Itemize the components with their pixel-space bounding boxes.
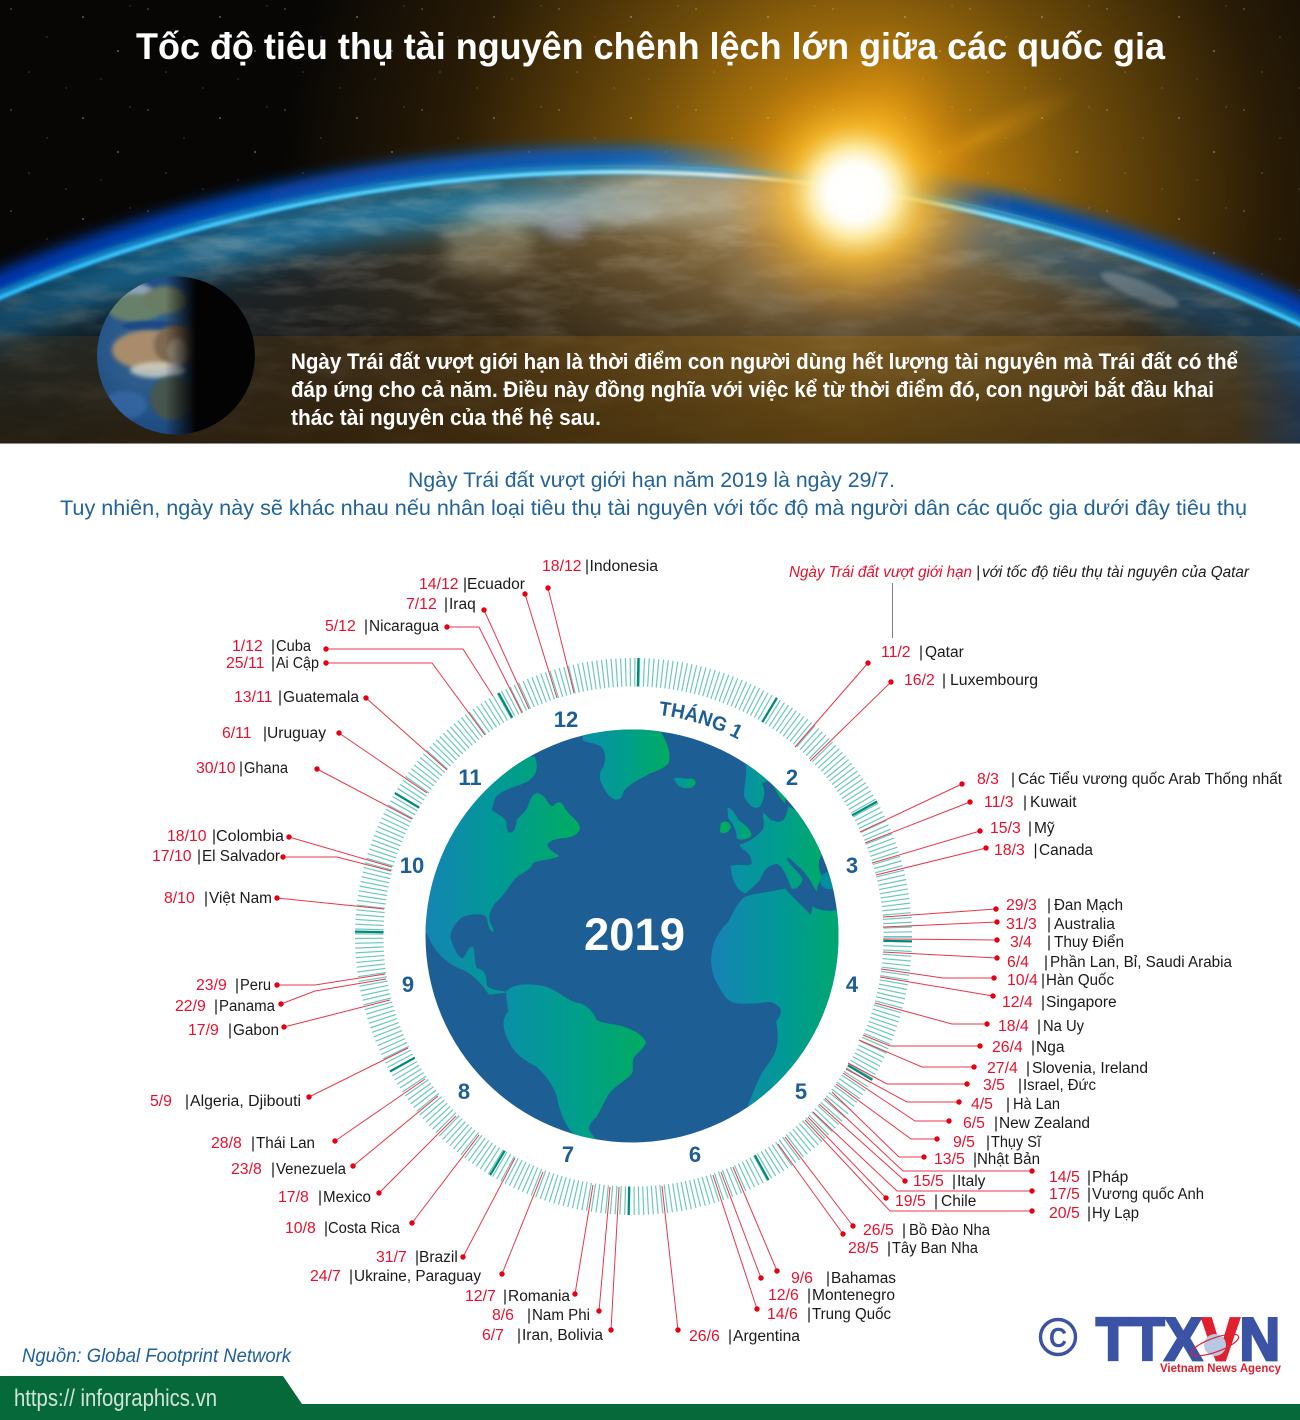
label: Colombia <box>167 828 392 867</box>
text block: definition: Ngày Trái đất vượt giới hạn là thời điểm con người dùng hết lượng tài nguyên mà Trái đất có thể <box>291 349 1238 374</box>
label: Canada: 18/3 <box>994 842 1025 859</box>
label: Bahamas: 9/6 <box>791 1270 813 1287</box>
label: Vietnam: | <box>204 890 208 907</box>
label: Montenegro: | <box>807 1287 811 1304</box>
label: China <box>713 1175 891 1323</box>
label: Gabon: | <box>228 1022 232 1039</box>
label: South Korea: 10/4 <box>1007 972 1038 989</box>
label: Uruguay: Uruguay <box>267 725 326 742</box>
label: Peru: | <box>235 977 239 994</box>
label: Greece: | <box>1087 1205 1091 1222</box>
label: South Korea <box>881 969 1114 989</box>
label: Italy <box>819 1104 986 1190</box>
text block: definition: thác tài nguyên của thế hệ sau. <box>291 405 601 430</box>
label: Ecuador: 14/12 <box>419 576 459 593</box>
label: South Africa: Nam Phi <box>532 1307 590 1324</box>
label: Romania: Romania <box>508 1288 570 1305</box>
label: Vietnam: Việt Nam <box>209 890 272 907</box>
legend note: how to read labels: | <box>976 564 980 581</box>
label: Iran, Bolivia: 6/7 <box>482 1327 504 1344</box>
label: Israel, Germany: Israel, Đức <box>1023 1077 1096 1094</box>
label: Ecuador: Ecuador <box>467 576 525 593</box>
label: El Salvador: El Salvador <box>202 848 280 865</box>
label: Romania: 12/7 <box>465 1288 496 1305</box>
label: Peru: 23/9 <box>196 977 227 994</box>
label: Romania: | <box>503 1288 507 1305</box>
footer: green URL bar <box>0 1376 1300 1420</box>
label: Thailand: | <box>251 1135 255 1152</box>
label: Luxembourg: Luxembourg <box>950 672 1038 689</box>
label: Ukraine, Paraguay: | <box>349 1268 353 1285</box>
label: Japan <box>832 1092 1040 1168</box>
label: Slovenia, Ireland: | <box>1026 1060 1030 1077</box>
label: Portugal: Bồ Đào Nha <box>909 1222 990 1239</box>
month labels around the globe: 11 <box>458 765 482 790</box>
month labels around the globe: 3 <box>846 853 858 878</box>
year label: 2019 <box>584 909 685 960</box>
label: Greece: Hy Lạp <box>1092 1205 1139 1222</box>
label: Australia: Australia <box>1054 916 1115 933</box>
label: Russia: | <box>1031 1039 1035 1056</box>
label: Costa Rica: | <box>324 1220 328 1237</box>
label: Egypt: Ai Cập <box>276 655 319 672</box>
label: Italy: Italy <box>957 1173 986 1190</box>
label: Algeria, Djibouti: | <box>185 1093 189 1110</box>
label: Gabon <box>188 1000 390 1039</box>
label: Finland, Belgium, Saudi Arabia <box>883 952 1232 971</box>
label: Ghana: Ghana <box>244 760 288 777</box>
label: Australia <box>883 916 1115 933</box>
label: Venezuela: Venezuela <box>276 1161 346 1178</box>
label: Iran, Bolivia: Iran, Bolivia <box>522 1327 603 1344</box>
label: Sweden: 3/4 <box>1010 934 1032 951</box>
label: Ghana: 30/10 <box>196 760 236 777</box>
label: Nicaragua: 5/12 <box>325 618 356 635</box>
label: Algeria, Djibouti: Algeria, Djibouti <box>190 1093 301 1110</box>
label: Bahamas <box>733 1167 896 1287</box>
label: Mexico: Mexico <box>323 1189 371 1206</box>
label: Mexico <box>278 1116 456 1206</box>
illustration: globe with 2019 <box>420 720 860 1142</box>
label: Ukraine, Paraguay <box>310 1172 543 1285</box>
label: France: | <box>1087 1169 1091 1186</box>
label: Panama: | <box>214 998 218 1015</box>
label: USA <box>872 820 1055 863</box>
label: Russia: 26/4 <box>992 1039 1023 1056</box>
label: Bahamas: | <box>826 1270 830 1287</box>
label: Qatar: 11/2 <box>881 644 911 661</box>
callouts: country labels clockwise from Qatar <box>150 558 1283 1345</box>
label: Spain: Tây Ban Nha <box>892 1240 978 1257</box>
label: Norway: Na Uy <box>1043 1018 1084 1035</box>
label: UAE: Các Tiểu vương quốc Arab Thống nhất <box>1018 771 1283 788</box>
label: Japan: 13/5 <box>934 1151 965 1168</box>
icon: small Earth half in shadow <box>97 276 255 434</box>
label: Gabon: 17/9 <box>188 1022 219 1039</box>
label: United Kingdom: Vương quốc Anh <box>1092 1186 1204 1203</box>
label: Ecuador <box>419 576 557 698</box>
label: Ghana: | <box>239 760 243 777</box>
label: Nicaragua: | <box>364 618 368 635</box>
label: Uruguay: 6/11 <box>222 725 252 742</box>
label: China: Trung Quốc <box>812 1306 891 1323</box>
label: Luxembourg: 16/2 <box>904 672 935 689</box>
label: Algeria, Djibouti: 5/9 <box>150 1093 172 1110</box>
label: Cuba <box>232 638 493 696</box>
label: Iraq: | <box>444 596 448 613</box>
label: France: 14/5 <box>1049 1169 1080 1186</box>
month labels around the globe: 4 <box>846 972 859 997</box>
legend note: how to read labels: với tốc độ tiêu thụ tài nguyên của Qatar <box>982 564 1250 581</box>
month 1 curved label: THÁNG 1 <box>660 701 742 740</box>
label: Cuba: Cuba <box>276 638 311 655</box>
label: Indonesia <box>542 558 658 693</box>
month labels around the globe: 10 <box>400 853 424 878</box>
label: Panama <box>175 979 386 1015</box>
label: Norway: | <box>1037 1018 1041 1035</box>
label: Colombia: 18/10 <box>167 828 207 845</box>
label: Switzerland <box>836 1084 1042 1151</box>
label: Kuwait: | <box>1023 794 1027 811</box>
continent: Africa <box>711 888 838 1108</box>
label: Israel, Germany: 3/5 <box>983 1077 1005 1094</box>
label: Indonesia: | <box>585 558 589 575</box>
label: Uruguay <box>222 725 427 793</box>
label: Peru: Peru <box>240 977 271 994</box>
label: Luxembourg <box>810 672 1038 761</box>
label: Iraq: Iraq <box>449 596 476 613</box>
label: Singapore: Singapore <box>1046 994 1117 1011</box>
label: Sweden <box>883 934 1124 951</box>
label: Japan: | <box>973 1151 977 1168</box>
label: Thailand: Thái Lan <box>256 1135 315 1152</box>
label: Argentina: Argentina <box>733 1328 800 1345</box>
label: Australia: | <box>1047 916 1051 933</box>
label: Egypt: | <box>271 655 275 672</box>
continent: South America <box>504 984 646 1140</box>
label: New Zealand: New Zealand <box>999 1115 1090 1132</box>
label: Qatar <box>795 644 964 747</box>
label: Finland, Belgium, Saudi Arabia: 6/4 <box>1007 954 1029 971</box>
month labels around the globe: 2 <box>786 765 798 790</box>
label: Finland, Belgium, Saudi Arabia: Phần Lan, Bỉ, Saudi Arabia <box>1050 954 1232 971</box>
label: Slovenia, Ireland: Slovenia, Ireland <box>1032 1060 1148 1077</box>
label: Norway: 18/4 <box>998 1018 1029 1035</box>
label: Qatar: Qatar <box>925 644 964 661</box>
label: Ghana <box>196 760 412 819</box>
legend note: how to read labels: Ngày Trái đất vượt giới hạn <box>789 564 972 581</box>
label: UAE: 8/3 <box>977 771 999 788</box>
continent: Ireland <box>720 822 731 833</box>
continent: Europe <box>730 806 822 894</box>
label: Switzerland: | <box>986 1134 990 1151</box>
label: New Zealand: 6/5 <box>963 1115 985 1132</box>
label: Denmark: Đan Mạch <box>1054 897 1123 914</box>
label: Mexico: 17/8 <box>278 1189 309 1206</box>
label: Spain: | <box>887 1240 891 1257</box>
continent: Scandinavia <box>744 760 787 808</box>
label: Argentina <box>662 1186 800 1345</box>
label: Chile <box>808 1117 976 1210</box>
label: France <box>825 1098 1128 1186</box>
label: Peru <box>196 974 385 994</box>
label: Sweden: Thuy Điển <box>1054 934 1124 951</box>
label: Singapore: | <box>1041 994 1045 1011</box>
label: Israel, Germany <box>848 1063 1096 1094</box>
label: Ukraine, Paraguay: 24/7 <box>310 1268 341 1285</box>
label: Portugal: | <box>902 1222 906 1239</box>
label: Guatemala <box>234 689 447 770</box>
heading: main title: Tốc độ tiêu thụ tài nguyên chênh lệch lớn giữa các quốc gia <box>136 26 1165 67</box>
label: Ukraine, Paraguay: Ukraine, Paraguay <box>354 1268 481 1285</box>
label: Russia: Nga <box>1036 1039 1065 1056</box>
label: Brazil <box>376 1158 515 1266</box>
subheading: intro sentences <box>60 468 1247 520</box>
label: Kuwait <box>865 794 1077 843</box>
month labels around the globe <box>400 701 859 1167</box>
text block: definition: đáp ứng cho cả năm. Điều này đồng nghĩa với việc kể từ thời điểm đó, con người bắt đầu khai <box>291 377 1214 402</box>
label: Iraq: 7/12 <box>406 596 437 613</box>
label: Guatemala: Guatemala <box>283 689 359 706</box>
month labels around the globe: 7 <box>562 1142 574 1167</box>
label: New Zealand <box>843 1073 1090 1132</box>
label: Japan: Nhật Bản <box>977 1151 1040 1168</box>
label: Romania <box>465 1185 593 1305</box>
label: Slovenia, Ireland <box>859 1040 1148 1077</box>
label: Iran, Bolivia <box>482 1187 619 1344</box>
banner: space photo of Earth at sunrise <box>0 0 1300 450</box>
label: Greece <box>805 1120 1139 1222</box>
label: Singapore: 12/4 <box>1002 994 1033 1011</box>
label: Switzerland: 9/5 <box>953 1134 975 1151</box>
label: Venezuela <box>231 1096 438 1178</box>
label: South Africa <box>492 1187 610 1324</box>
label: Argentina: | <box>728 1328 732 1345</box>
legend note: how to read labels <box>789 564 1250 638</box>
label: Australia: 31/3 <box>1006 916 1037 933</box>
label: Switzerland: Thụy Sĩ <box>991 1134 1042 1151</box>
label: Montenegro: 12/6 <box>768 1287 799 1304</box>
label: Kuwait: Kuwait <box>1030 794 1077 811</box>
label: Montenegro: Montenegro <box>812 1287 895 1304</box>
label: Kuwait: 11/3 <box>984 794 1014 811</box>
label: France: Pháp <box>1092 1169 1128 1186</box>
label: Netherlands: 4/5 <box>971 1096 993 1113</box>
month labels around the globe: 12 <box>554 707 578 732</box>
label: China: | <box>807 1306 811 1323</box>
label: El Salvador <box>152 848 391 871</box>
label: Chile: Chile <box>941 1193 976 1210</box>
label: New Zealand: | <box>994 1115 998 1132</box>
label: Algeria, Djibouti <box>150 1048 408 1110</box>
label: Portugal <box>785 1137 990 1239</box>
label: Denmark: | <box>1047 897 1051 914</box>
label: Canada: | <box>1034 842 1038 859</box>
logo: TTXVN Vietnam News Agency: TTXVN <box>1096 1306 1280 1373</box>
label: Gabon: Gabon <box>233 1022 279 1039</box>
label: United Kingdom <box>813 1112 1204 1203</box>
label: South Korea: Hàn Quốc <box>1046 972 1114 989</box>
label: Iraq <box>406 596 529 709</box>
label: Chile: | <box>934 1193 938 1210</box>
label: Vietnam: 8/10 <box>164 890 195 907</box>
label: Spain: 28/5 <box>848 1240 879 1257</box>
label: Brazil: Brazil <box>419 1249 458 1266</box>
label: USA: | <box>1028 820 1032 837</box>
label: Italy: | <box>952 1173 956 1190</box>
label: Argentina: 26/6 <box>689 1328 720 1345</box>
logo: TTXVN Vietnam News Agency: Vietnam News Agency <box>1160 1363 1282 1375</box>
label: Chile: 19/5 <box>895 1193 926 1210</box>
continent: Iceland <box>674 778 696 788</box>
label: Bahamas: Bahamas <box>831 1270 896 1287</box>
label: Mexico: | <box>318 1189 322 1206</box>
footer: green URL bar: https:// infographics.vn <box>14 1385 217 1412</box>
label: Costa Rica: 10/8 <box>285 1220 316 1237</box>
label: Venezuela: | <box>271 1161 275 1178</box>
label: Costa Rica <box>285 1135 479 1237</box>
label: Netherlands: Hà Lan <box>1013 1096 1060 1113</box>
label: Thailand: 28/8 <box>211 1135 242 1152</box>
label: South Africa: 8/6 <box>492 1307 514 1324</box>
label: Russia <box>863 1035 1065 1056</box>
label: Netherlands: | <box>1006 1096 1010 1113</box>
label: Iran, Bolivia: | <box>517 1327 521 1344</box>
continent: Great Britain <box>727 808 752 840</box>
month labels around the globe: 9 <box>402 972 414 997</box>
label: Netherlands <box>846 1069 1060 1113</box>
label: Panama: 22/9 <box>175 998 206 1015</box>
label: Sweden: | <box>1047 934 1051 951</box>
label: Vietnam <box>164 890 384 909</box>
label: Colombia: | <box>212 828 216 845</box>
chart: 365-day tick ring <box>355 658 912 1215</box>
label: Norway <box>875 1003 1084 1035</box>
label: Denmark <box>883 897 1123 917</box>
continent: Greenland <box>582 730 670 800</box>
label: Nicaragua <box>325 618 522 713</box>
label: Slovenia, Ireland: 27/4 <box>987 1060 1018 1077</box>
label: United Kingdom: | <box>1087 1186 1091 1203</box>
label: Montenegro <box>721 1172 895 1304</box>
month labels around the globe: 5 <box>795 1079 807 1104</box>
label: United Kingdom: 17/5 <box>1049 1186 1080 1203</box>
label: Italy: 15/5 <box>913 1173 944 1190</box>
label: South Africa: | <box>527 1307 531 1324</box>
label: Colombia: Colombia <box>216 828 284 845</box>
label: Brazil: 31/7 <box>376 1249 407 1266</box>
label: Indonesia: 18/12 <box>542 558 582 575</box>
label: Brazil: | <box>415 1249 419 1266</box>
month labels around the globe: 8 <box>458 1079 470 1104</box>
label: Panama: Panama <box>219 998 275 1015</box>
subheading: intro sentences: Tuy nhiên, ngày này sẽ khác nhau nếu nhân loại tiêu thụ tài nguyên với tốc độ mà người dân các quốc gia dưới đây tiêu thụ <box>60 496 1247 520</box>
label: Nicaragua: Nicaragua <box>369 618 439 635</box>
label: China: 14/6 <box>767 1306 798 1323</box>
label: Portugal: 26/5 <box>863 1222 894 1239</box>
label: Guatemala: 13/11 <box>234 689 273 706</box>
label: Greece: 20/5 <box>1049 1205 1080 1222</box>
label: Thailand <box>211 1079 425 1152</box>
logo: TTXVN Vietnam News Agency: C <box>1049 1322 1067 1353</box>
label: El Salvador: 17/10 <box>152 848 192 865</box>
label: USA: 15/3 <box>990 820 1021 837</box>
month labels around the globe: 6 <box>689 1142 701 1167</box>
subheading: intro sentences: Ngày Trái đất vượt giới hạn năm 2019 là ngày 29/7. <box>408 468 895 492</box>
label: Singapore <box>880 977 1117 1011</box>
label: Cuba: | <box>271 638 275 655</box>
label: South Korea: | <box>1041 972 1045 989</box>
label: Ecuador: | <box>463 576 467 593</box>
label: Guatemala: | <box>278 689 282 706</box>
label: El Salvador: | <box>197 848 201 865</box>
label: Luxembourg: | <box>942 672 946 689</box>
label: Spain <box>778 1144 978 1257</box>
continent: Anatolia <box>820 872 833 890</box>
source note: Nguồn: Global Footprint Network <box>22 1346 292 1367</box>
label: Canada: Canada <box>1039 842 1093 859</box>
label: Finland, Belgium, Saudi Arabia: | <box>1044 954 1048 971</box>
continent: North and Central America <box>420 753 580 995</box>
label: Egypt: 25/11 <box>226 655 265 672</box>
label: UAE <box>860 771 1283 832</box>
label: Israel, Germany: | <box>1018 1077 1022 1094</box>
label: USA: Mỹ <box>1034 820 1055 837</box>
label: Qatar: | <box>919 644 923 661</box>
label: Cuba: 1/12 <box>232 638 263 655</box>
label: Denmark: 29/3 <box>1006 897 1037 914</box>
label: Canada <box>876 842 1093 875</box>
label: Venezuela: 23/8 <box>231 1161 262 1178</box>
label: Uruguay: | <box>263 725 267 742</box>
label: Costa Rica: Costa Rica <box>328 1220 400 1237</box>
panel: translucent text band <box>0 336 1300 443</box>
text block: definition <box>291 349 1238 430</box>
label: Indonesia: Indonesia <box>590 558 658 575</box>
label: UAE: | <box>1011 771 1015 788</box>
label: Egypt <box>226 655 485 735</box>
